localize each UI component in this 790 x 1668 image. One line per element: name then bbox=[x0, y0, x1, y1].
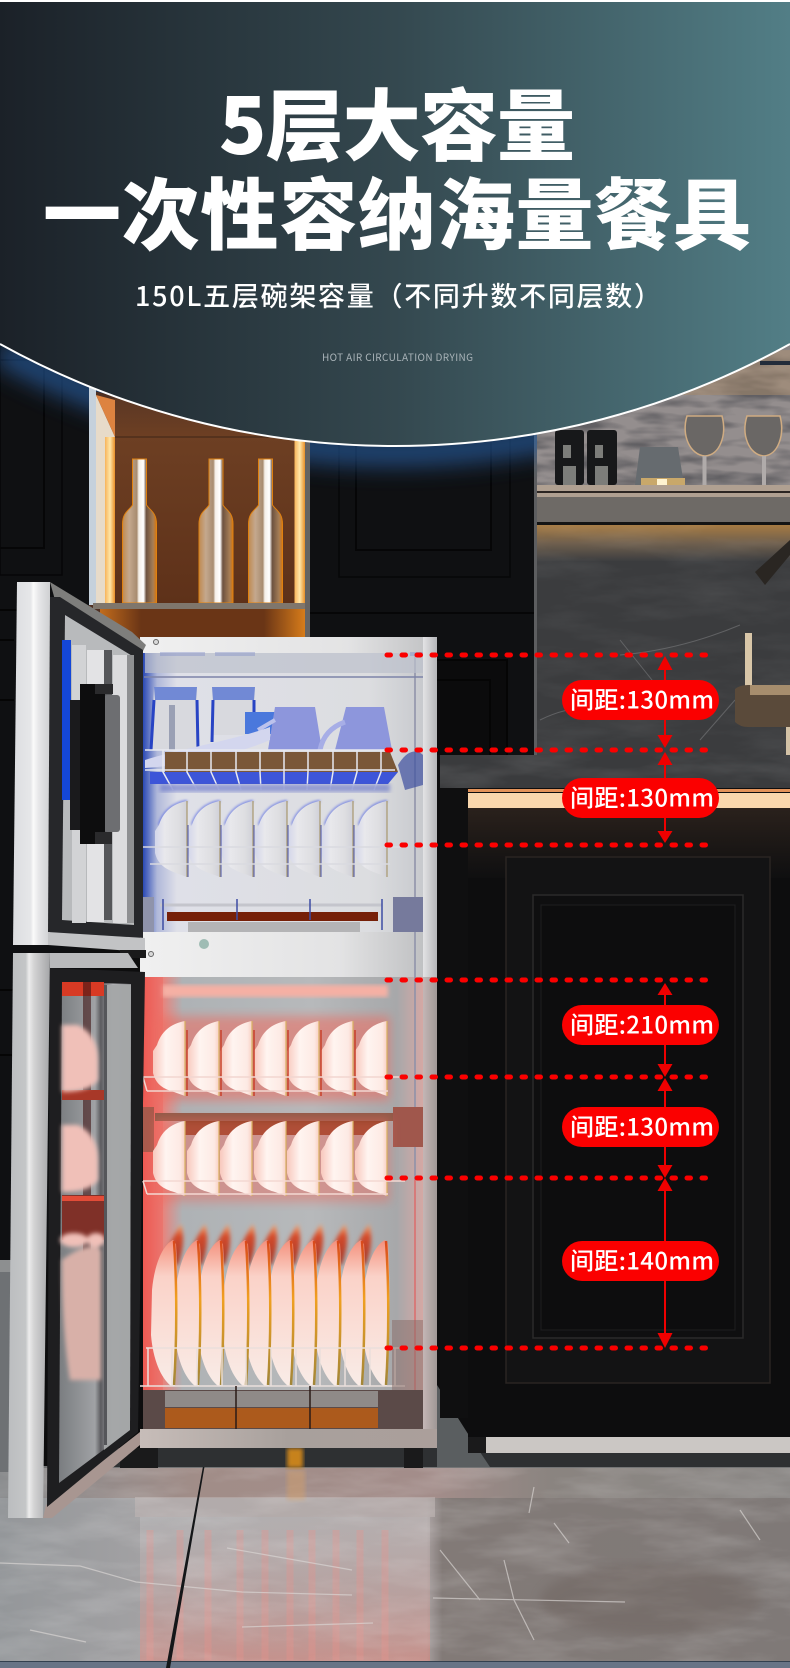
bowl row 4 glow bbox=[155, 1118, 390, 1202]
panel: stone shelf with glasses bbox=[537, 340, 790, 525]
shelf lip bbox=[537, 485, 790, 525]
title line 1: 5层大容量 bbox=[219, 65, 575, 177]
door glass bbox=[59, 982, 131, 1483]
cabinet top frame bbox=[140, 637, 437, 653]
lower cabinet interior bbox=[143, 977, 425, 1429]
left wall black panels bbox=[0, 340, 90, 1260]
bottom tray bbox=[143, 1386, 423, 1429]
top glow bar bbox=[162, 985, 388, 997]
icon: glass 2 bbox=[212, 687, 255, 742]
icon: wine glass 2 bbox=[745, 416, 782, 486]
arrow heads bbox=[658, 656, 672, 1348]
panel: cabinet body bbox=[120, 637, 437, 1468]
legs bbox=[120, 1448, 423, 1468]
left wall lower floor sliver bbox=[0, 1251, 15, 1472]
door silver edge bbox=[13, 582, 50, 945]
middle frame bbox=[140, 932, 425, 977]
icon: glass 1 bbox=[151, 687, 198, 750]
right frame upper bbox=[423, 637, 437, 977]
plate rack bbox=[140, 1348, 405, 1386]
label 130mm third: 间距:130mm bbox=[570, 1108, 714, 1142]
icon: black bottles bbox=[555, 430, 617, 485]
rack 3 wires bbox=[143, 1077, 405, 1091]
countertop bbox=[440, 755, 790, 788]
panel: upper door bbox=[13, 582, 146, 958]
bottom frame bbox=[140, 1429, 437, 1448]
label 130mm: 间距:130mm bbox=[570, 680, 714, 716]
heater assembly upper bbox=[143, 897, 423, 932]
door hinge bbox=[120, 950, 146, 958]
red reflection stripes bbox=[62, 982, 104, 1282]
row of bowls upper bbox=[155, 801, 387, 877]
plates bbox=[151, 1240, 389, 1386]
top white strip bbox=[0, 0, 790, 2]
bottle 1 bbox=[122, 459, 156, 603]
icon: saucers bbox=[145, 727, 270, 768]
panel: upper shelf bbox=[143, 653, 423, 932]
bottle 2 bbox=[199, 459, 233, 603]
wood under shelf bbox=[100, 609, 305, 639]
right bracket lower rack bbox=[392, 1320, 423, 1395]
niche shelf bbox=[93, 603, 305, 609]
right frame lower bbox=[423, 977, 437, 1448]
rack 1 shadow bbox=[160, 784, 390, 792]
door glass bbox=[62, 615, 134, 925]
icon: right LED strip bbox=[294, 440, 305, 603]
door bottom bar bbox=[48, 932, 145, 952]
icon: cup 2 bbox=[320, 707, 392, 750]
door stripes bbox=[62, 640, 134, 923]
panel: marble backsplash bbox=[537, 525, 790, 757]
plate glow shadows bbox=[164, 1224, 371, 1265]
rack 4 wires bbox=[143, 1181, 405, 1194]
english caption: HOT AIR CIRCULATION DRYING bbox=[322, 349, 473, 364]
arrow shafts bbox=[664, 665, 666, 1340]
title line 2: 一次性容纳海量餐具 bbox=[43, 154, 751, 266]
panel: lower shelves bbox=[140, 977, 423, 1429]
dark floor band under furniture bbox=[100, 1385, 790, 1500]
blue glow along curve bbox=[0, 350, 790, 452]
chart: spacing dimension lines bbox=[387, 655, 719, 1348]
door top side bbox=[50, 582, 146, 651]
top hinge bar bbox=[50, 953, 138, 968]
icon: door handle bbox=[70, 684, 120, 844]
header band bbox=[0, 2, 790, 446]
label 140mm: 间距:140mm bbox=[570, 1242, 714, 1276]
panel: lower cabinet bbox=[440, 788, 790, 1453]
icon: blue square bbox=[245, 712, 275, 734]
LED strip under counter bbox=[468, 789, 790, 808]
icon: wine glass 1 bbox=[685, 416, 724, 486]
bowl row 3 glow bbox=[155, 1016, 390, 1101]
door frame bbox=[48, 597, 143, 938]
icon: left LED strip bbox=[105, 437, 115, 603]
screws bbox=[148, 640, 158, 956]
rack 1 blue underside bbox=[150, 772, 398, 784]
label 130mm second: 间距:130mm bbox=[570, 778, 714, 814]
panel: upper right cabinet door bbox=[310, 430, 537, 760]
inner rail bbox=[414, 653, 416, 1429]
icon: faucet bbox=[735, 540, 790, 757]
bowl row 3 bbox=[153, 1021, 387, 1096]
door right band bbox=[104, 985, 131, 1450]
left red wall bbox=[143, 977, 163, 1429]
rack 1 wires bbox=[145, 750, 395, 790]
upper cabinet interior bbox=[143, 653, 425, 932]
rod and brackets bbox=[143, 1107, 423, 1152]
reflected bowls bbox=[60, 1025, 105, 1380]
door bottom side bbox=[43, 1432, 140, 1518]
right bracket upper rack bbox=[398, 751, 423, 790]
icon: cup 1 bbox=[258, 707, 322, 750]
dotted level lines bbox=[387, 655, 706, 1348]
floor bbox=[0, 1450, 790, 1668]
subtitle: 150L五层碗架容量（不同升数不同层数） bbox=[135, 275, 661, 314]
bowl row 4 bbox=[153, 1121, 387, 1196]
rack 2 wires bbox=[143, 847, 400, 864]
icon: candle glass bbox=[635, 447, 685, 486]
rack 1 wood plank bbox=[165, 752, 398, 772]
panel: lower door bbox=[8, 953, 145, 1518]
label 210mm: 间距:210mm bbox=[570, 1006, 714, 1040]
niche side post bbox=[305, 430, 310, 640]
indicator light bbox=[199, 939, 209, 949]
bottle 3 bbox=[248, 459, 282, 603]
door frame bbox=[47, 968, 145, 1507]
panel: wine niche bbox=[89, 385, 310, 640]
door silver edge bbox=[8, 953, 50, 1518]
